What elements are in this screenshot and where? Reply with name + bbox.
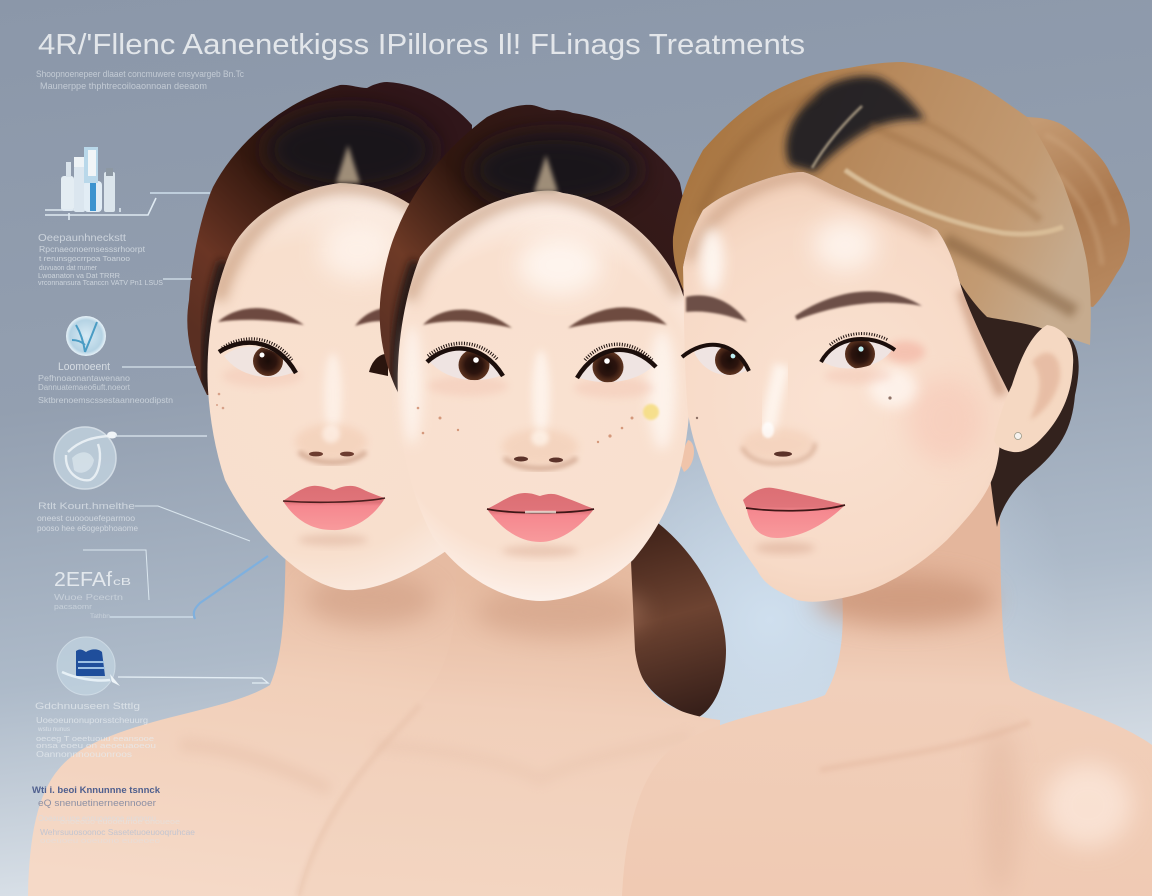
text block: section three: Rtlt Kourt.hmelthe (38, 501, 135, 512)
right woman: skin marks (696, 396, 892, 419)
text block: stat caption: pacsaomr (54, 604, 93, 611)
portrait: left woman (28, 82, 640, 896)
right woman: hair streaks (700, 95, 1075, 312)
text block: section one: Lwoanaton va Dat TRRR (38, 273, 120, 280)
right woman: eyebrows (686, 291, 922, 322)
connector: section three (135, 506, 250, 541)
text block: section two: Dannuatemaeo6uft.noeort (38, 383, 131, 392)
text block: section five: Wehrsuuosoonoc Sasetetuoeuooqruhcae (40, 827, 195, 837)
right woman: hair (673, 62, 1091, 345)
text block: section four: Uoeoeunonuporsstcheuurg (36, 716, 148, 725)
connector: section one (163, 278, 192, 280)
left woman: partial eye (369, 354, 388, 376)
text block: section one: t rerunsgocrrpoa Toanoo (39, 254, 130, 263)
subtitle: Maunerppe thphtrecoiloaonnoan deeaom (40, 81, 207, 92)
left woman: eyebrows (218, 308, 384, 326)
callout frame (83, 550, 149, 600)
text block: section four: Gdchnuuseen Stttlg (35, 701, 140, 712)
text block: section four: oeceg T oeetuouu eeansooe (36, 734, 154, 743)
left woman: eye (219, 339, 302, 387)
connector: implant orb (118, 677, 268, 683)
right woman: bun strands (1045, 135, 1115, 265)
heading: vein orb: Loomoeent (58, 361, 110, 373)
left woman: freckles (216, 393, 224, 409)
title: 4R/'Fllenc Aanenetkigss IPillores Il! FLinags Treatments (38, 29, 805, 61)
text block: section one: vrconnansura Tcanccn VATV Pn1 LSUS (38, 280, 163, 287)
connector: vein orb (122, 366, 196, 368)
left woman: nose (295, 353, 367, 462)
right woman: ear with earring (994, 325, 1073, 452)
connector: bottles (150, 192, 210, 194)
text block: section one (38, 232, 163, 287)
middle woman: nose (502, 350, 578, 468)
text block: section one: Rpcnaeonoemsesssrhoorpt (39, 245, 146, 254)
text block: section one: duvuaon dat rrumer (39, 265, 98, 272)
text block: section four: wstu nunus (37, 727, 70, 733)
middle woman: eyebrows (423, 307, 667, 328)
text block: section five: Ooeauo uoe eonuoaeooe eunnonu (38, 813, 156, 823)
text block: section two (38, 374, 173, 405)
text block: section four: Oannonnnoouonroos (36, 750, 132, 759)
text block: section five (32, 785, 195, 845)
middle woman: ponytail (629, 505, 726, 718)
text block: section three (37, 501, 139, 533)
portrait: middle woman (298, 105, 726, 896)
text block: section four (35, 701, 156, 759)
text block: section four: onsa eoeu on aeoeuaoeou (36, 743, 156, 750)
right woman: hair bun (1000, 110, 1130, 307)
text block: section two: Pefhnoaonantawenano (38, 374, 131, 383)
subtitle: Shoopnoenepeer dlaaet concmuwere cnsyvargeb Bn.Tc (36, 69, 244, 80)
text block: section one: Oeepaunhneckstt (38, 232, 126, 244)
right woman: dark underhair (950, 270, 1079, 527)
text block: section five: Wti i. beoi Knnunnne tsnnck (32, 785, 161, 796)
middle woman: right eye (574, 344, 656, 398)
text block: section five: onoeouo euooeunoe onoueoe (60, 819, 180, 826)
icon: glass orb with face sketch (54, 427, 117, 489)
icon: blue implant orb (57, 637, 120, 695)
right woman: nose (742, 365, 815, 463)
text block: section three: pooso hee e6ogepbhoaome (37, 524, 139, 533)
text block: stat caption (54, 592, 123, 620)
connector: blue arrow (110, 556, 268, 619)
subtitle (36, 69, 244, 92)
middle woman: left eye (427, 343, 508, 396)
stat: 2EFAf (54, 569, 112, 591)
text block: section two: Sktbrenoemscssestaanneoodipstn (38, 395, 173, 405)
icon: vein orb (66, 316, 106, 356)
text block: stat caption: Wuoe Pcecrtn (54, 592, 123, 602)
text block: section three: oneest cuooouefeparmoo (37, 514, 136, 523)
right woman: left eye (682, 345, 749, 375)
connector: glass orb (115, 435, 207, 437)
stat: cB (113, 577, 132, 588)
icon: product bottles (45, 147, 156, 220)
middle woman: freckles and dots (417, 404, 659, 443)
right woman: lips (743, 488, 845, 554)
text block: section five: ooeuoeu ooeuono euoeoeo (40, 836, 160, 845)
right woman: dark crown (786, 76, 925, 172)
right woman: right eye (821, 334, 895, 384)
portrait: right woman (622, 62, 1152, 896)
middle woman: lips (487, 493, 594, 557)
text block: section five: eQ snenuetinerneennooer (38, 798, 156, 808)
text block: stat caption: Tathbn (90, 613, 110, 620)
left woman: lips (283, 486, 385, 546)
